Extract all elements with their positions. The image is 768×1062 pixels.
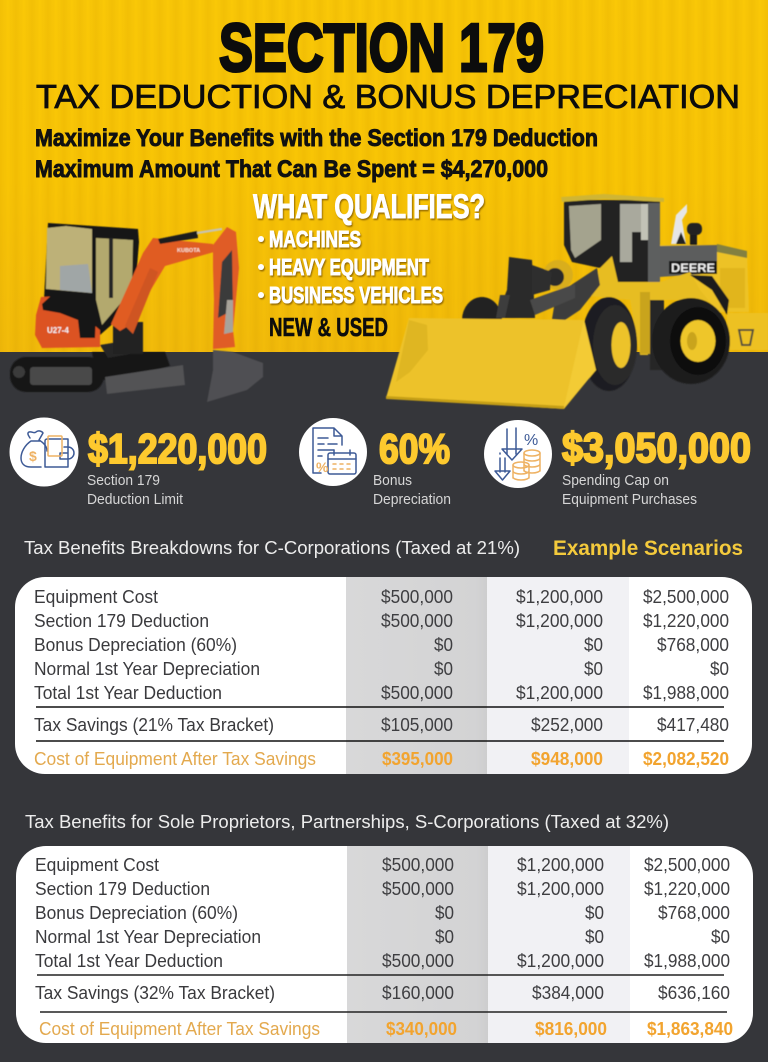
loader lift arm <box>496 257 600 320</box>
icon: document and calendar <box>299 418 367 486</box>
excavator orange body: U27-4 <box>47 326 69 335</box>
caption: section 179 deduction limit <box>87 472 184 508</box>
caption: bonus depreciation <box>373 472 451 508</box>
value: $1,220,000: $1,220,000 <box>88 425 267 472</box>
scenario column 1: $0 <box>435 903 454 923</box>
row labels: Equipment Cost <box>34 587 158 607</box>
row labels: Tax Savings (21% Tax Bracket) <box>34 715 274 735</box>
scenario column 1: $500,000 <box>381 683 453 703</box>
scenario column 1 <box>381 587 453 769</box>
caption: bonus depreciation: Depreciation <box>373 491 451 508</box>
scenario column 1: $0 <box>434 635 453 655</box>
scenario column 3: $0 <box>710 659 729 679</box>
scenario column 3: $1,220,000 <box>643 611 729 631</box>
caption: section 179 deduction limit: Section 179 <box>87 472 160 489</box>
scenario column 2 <box>516 587 603 769</box>
loader bucket <box>386 318 596 409</box>
value: 60%: 60% <box>379 425 450 472</box>
scenario column 3: $1,220,000 <box>644 879 730 899</box>
subtitle: TAX DEDUCTION & BONUS DEPRECIATION <box>36 78 740 115</box>
excavator bucket <box>207 350 263 402</box>
scenario column 1: $0 <box>434 659 453 679</box>
scenario column 3: $1,863,840 <box>647 1019 733 1039</box>
scenario column 2: $1,200,000 <box>517 879 604 899</box>
loader hood <box>659 244 749 312</box>
scenario column 2: $1,200,000 <box>516 587 603 607</box>
excavator orange body <box>35 292 143 358</box>
excavator stick <box>213 227 239 349</box>
scenario column 1: $395,000 <box>382 749 453 769</box>
far front wheel <box>462 297 502 343</box>
exhaust and air intake <box>671 204 702 245</box>
loader cab <box>561 194 664 283</box>
what qualifies heading: WHAT QUALIFIES? <box>253 188 485 226</box>
scenario column 3: $636,160 <box>658 983 730 1003</box>
illustration: yellow wheel loader <box>386 194 768 409</box>
row labels: Bonus Depreciation (60%) <box>35 903 238 923</box>
qualifying list: MACHINES <box>269 226 361 252</box>
scenario column 3: $768,000 <box>658 903 730 923</box>
heading: example scenarios: Example Scenarios <box>553 536 743 560</box>
scenario column 1: $500,000 <box>382 879 454 899</box>
heading: c-corporations: Tax Benefits Breakdowns for C-Corporations (Taxed at 21%) <box>24 537 520 558</box>
scenario column 1: $0 <box>435 927 454 947</box>
heading: sole proprietors: Tax Benefits for Sole Proprietors, Partnerships, S-Corporations (Taxed at 32%) <box>25 811 669 832</box>
scenario column 3: $2,500,000 <box>644 855 730 875</box>
panel: c-corporation table <box>15 577 752 774</box>
stat: section 179 deduction limit <box>10 418 267 508</box>
caption: spending cap: Equipment Purchases <box>562 491 697 508</box>
excavator boom <box>111 229 222 334</box>
scenario column 2: $1,200,000 <box>516 683 603 703</box>
row labels: Total 1st Year Deduction <box>35 951 223 971</box>
row labels: Section 179 Deduction <box>35 879 210 899</box>
scenario column 3 <box>644 855 733 1039</box>
scenario column 1: $500,000 <box>381 587 453 607</box>
caption: spending cap: Spending Cap on <box>562 472 669 489</box>
row labels: Cost of Equipment After Tax Savings <box>39 1019 320 1039</box>
scenario column 2: $0 <box>585 927 604 947</box>
scenario column 2: $1,200,000 <box>516 611 603 631</box>
title: SECTION 179 <box>219 10 544 86</box>
icon: arrows and coins: % <box>524 432 538 449</box>
scenario column 2: $1,200,000 <box>517 951 604 971</box>
scenario column 2: $948,000 <box>531 749 603 769</box>
scenario column 2: $816,000 <box>535 1019 607 1039</box>
scenario column 1: $340,000 <box>386 1019 457 1039</box>
scenario column 3 <box>643 587 729 769</box>
loader rear counterweight <box>727 313 768 350</box>
scenario column 1: $500,000 <box>382 951 454 971</box>
scenario column 3: $417,480 <box>657 715 729 735</box>
icon: document and calendar: % <box>316 459 329 475</box>
scenario column 1 <box>382 855 457 1039</box>
scenario column 2: $384,000 <box>532 983 604 1003</box>
row labels: Tax Savings (32% Tax Bracket) <box>35 983 275 1003</box>
scenario column 3: $0 <box>711 927 730 947</box>
excavator cab <box>44 223 139 335</box>
qualifying list: BUSINESS VEHICLES <box>269 282 443 308</box>
scenario column 1: $105,000 <box>381 715 453 735</box>
excavator boom: KUBOTA <box>177 248 200 254</box>
front wheel <box>581 297 637 391</box>
stat: spending cap <box>484 420 751 508</box>
loader yellow chassis <box>590 256 729 370</box>
row labels: Total 1st Year Deduction <box>34 683 222 703</box>
scenario column 2: $1,200,000 <box>517 855 604 875</box>
row labels <box>34 587 316 769</box>
row labels: Cost of Equipment After Tax Savings <box>34 749 316 769</box>
excavator tracks <box>10 352 185 394</box>
row labels: Bonus Depreciation (60%) <box>34 635 237 655</box>
stat: bonus depreciation <box>299 418 451 508</box>
scenario column 1: $160,000 <box>382 983 454 1003</box>
deere badge: DEERE <box>671 263 715 275</box>
scenario column 1: $500,000 <box>382 855 454 875</box>
tagline: maximum amount: Maximum Amount That Can Be Spent = $4,270,000 <box>35 156 548 183</box>
row labels <box>35 855 320 1039</box>
qualifying list <box>258 226 443 308</box>
scenario column 3: $1,988,000 <box>644 951 730 971</box>
scenario column 2: $0 <box>585 903 604 923</box>
rear wheel <box>652 298 730 384</box>
caption: bonus depreciation: Bonus <box>373 472 412 489</box>
row labels: Section 179 Deduction <box>34 611 209 631</box>
scenario column 1: $500,000 <box>381 611 453 631</box>
caption: section 179 deduction limit: Deduction Limit <box>87 491 184 508</box>
value: $3,050,000: $3,050,000 <box>562 424 751 471</box>
yellow corrugated header background <box>0 0 768 352</box>
row labels: Normal 1st Year Depreciation <box>34 659 260 679</box>
scenario column 2: $0 <box>584 659 603 679</box>
new and used label: NEW & USED <box>269 312 388 342</box>
illustration: orange mini excavator <box>10 223 263 402</box>
tagline: maximize benefits: Maximize Your Benefits with the Section 179 Deduction <box>35 125 598 152</box>
scenario column 2: $0 <box>584 635 603 655</box>
scenario column 3: $2,082,520 <box>643 749 729 769</box>
icon: money bag and wallet <box>10 418 78 486</box>
caption: spending cap <box>562 472 697 508</box>
scenario column 2: $252,000 <box>531 715 603 735</box>
row labels: Equipment Cost <box>35 855 159 875</box>
scenario column 3: $1,988,000 <box>643 683 729 703</box>
scenario column 3: $2,500,000 <box>643 587 729 607</box>
row labels: Normal 1st Year Depreciation <box>35 927 261 947</box>
panel: sole proprietors table <box>16 846 753 1043</box>
qualifying list: HEAVY EQUIPMENT <box>269 254 429 280</box>
icon: arrows and coins <box>484 420 552 488</box>
scenario column 2 <box>517 855 607 1039</box>
scenario column 3: $768,000 <box>657 635 729 655</box>
icon: money bag and wallet: $ <box>29 448 37 464</box>
